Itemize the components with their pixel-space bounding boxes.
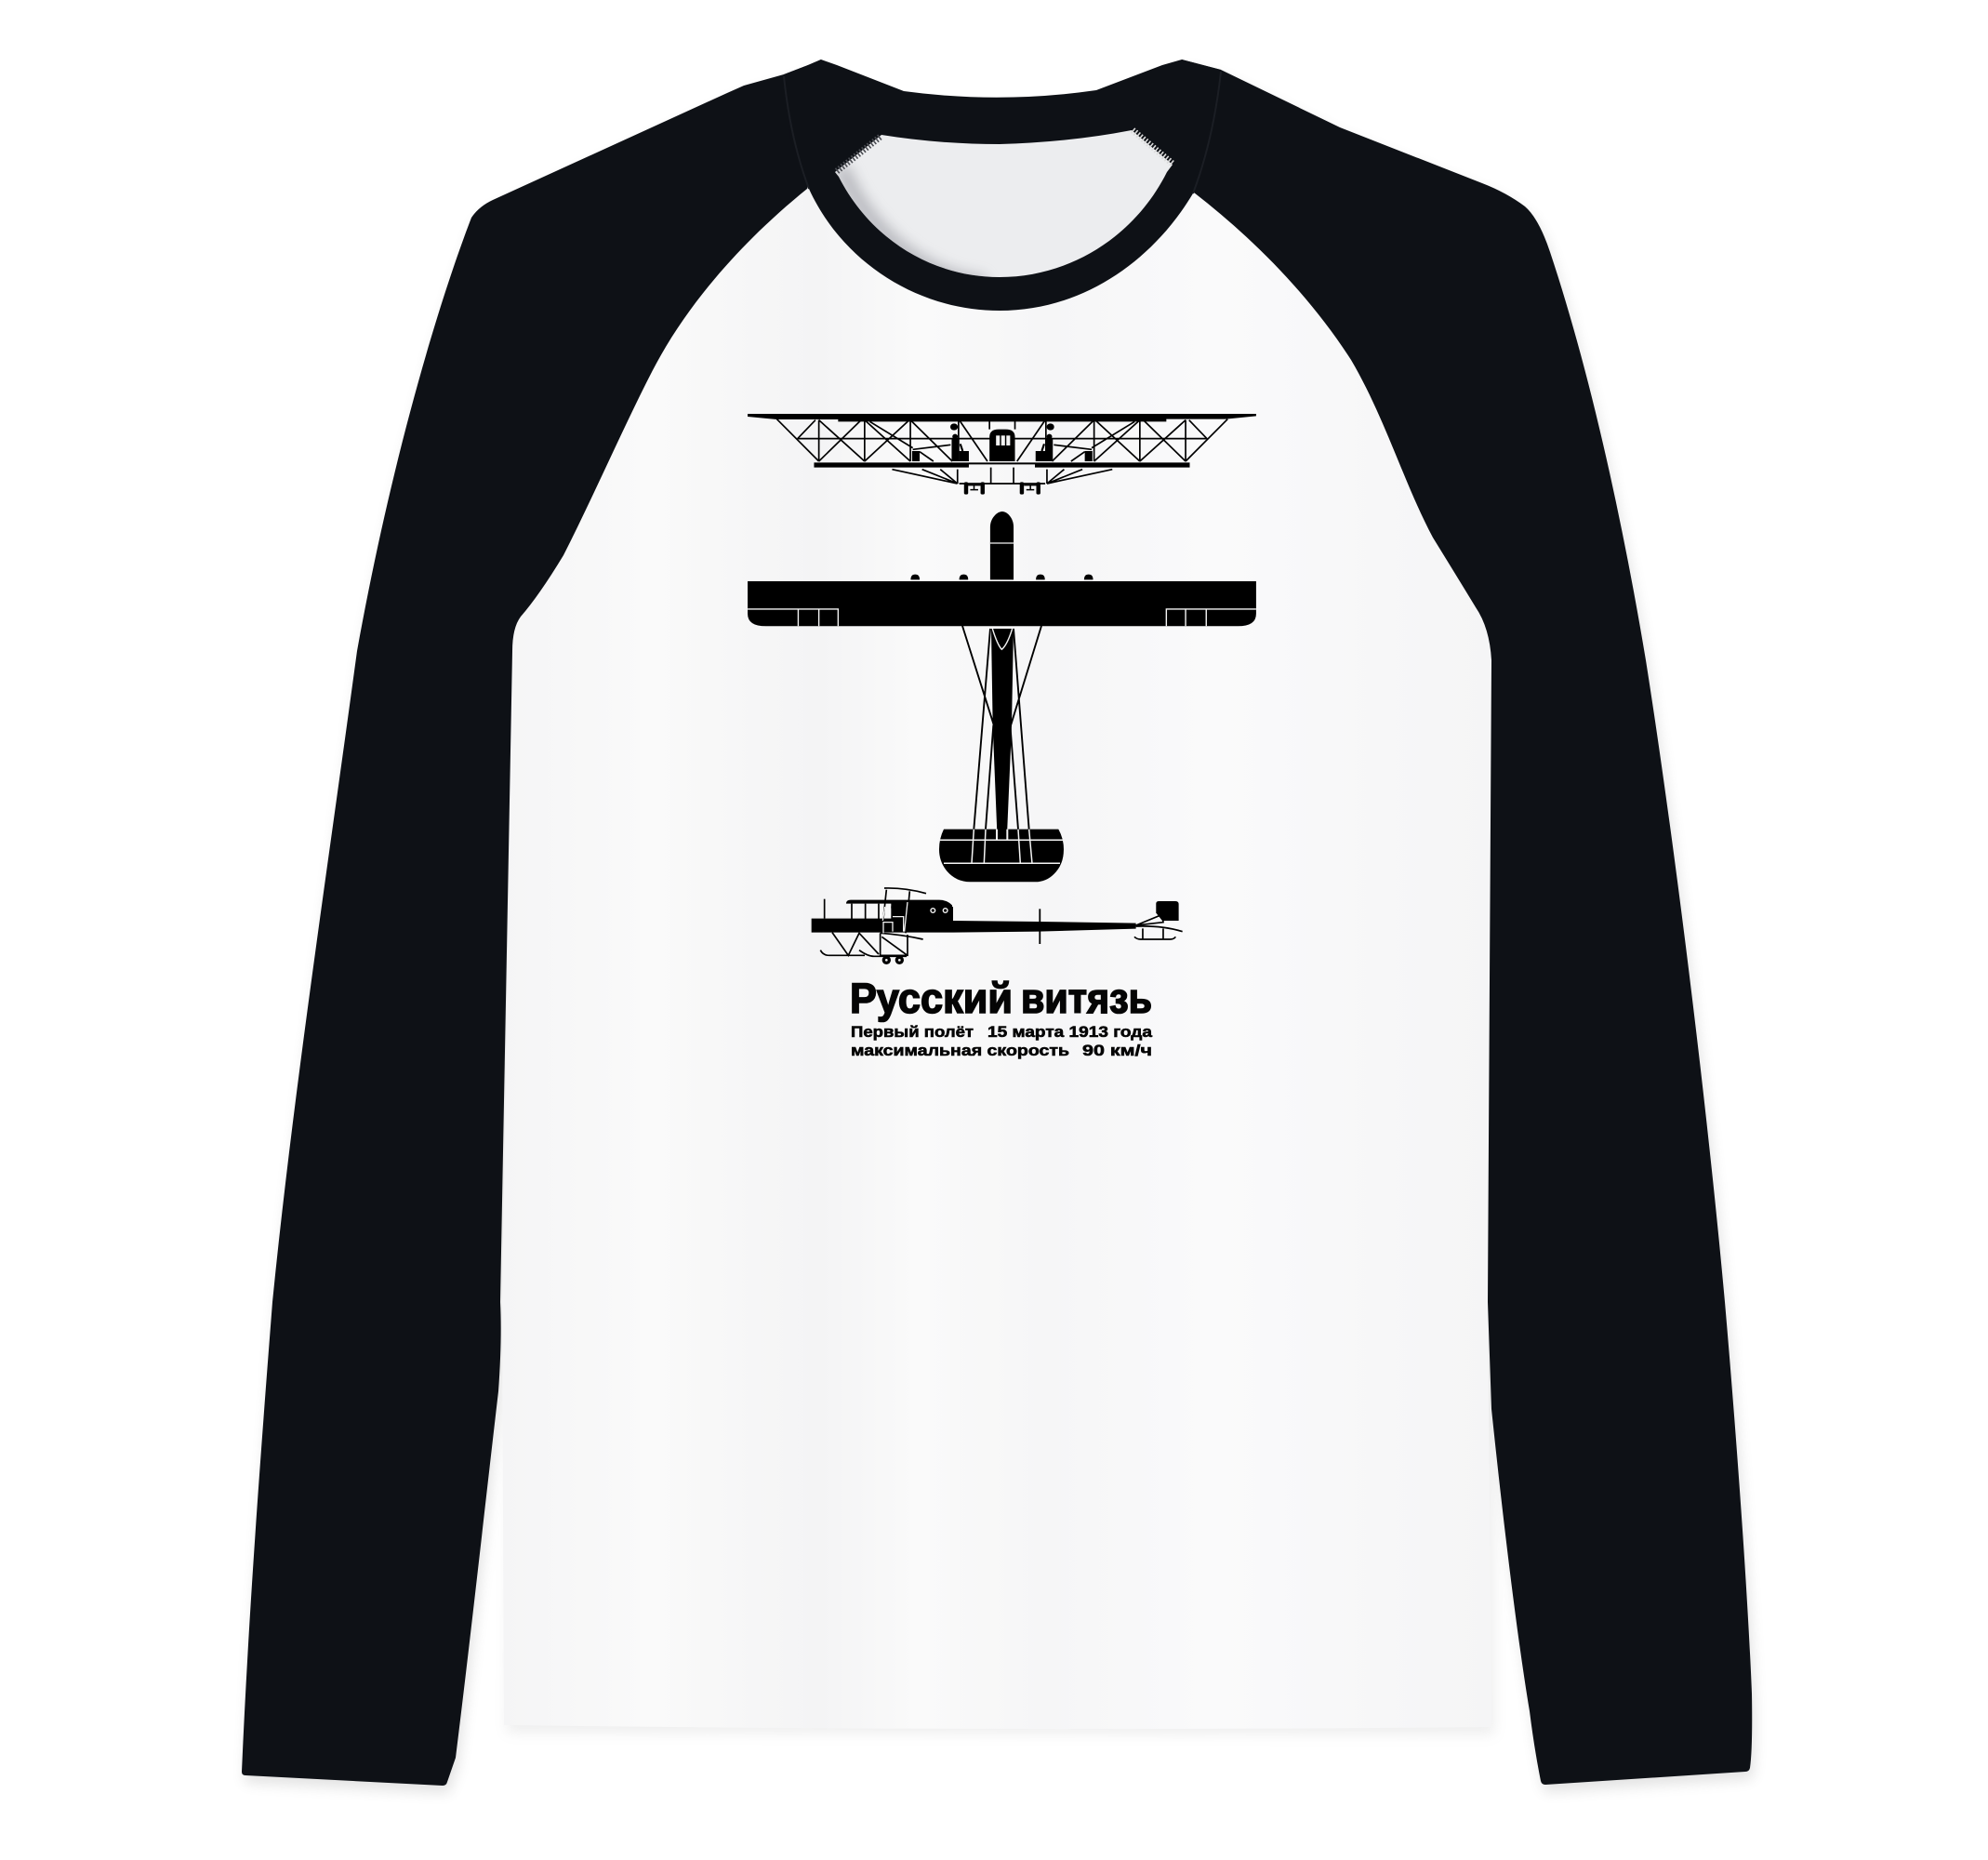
front view of aircraft	[748, 414, 1256, 495]
upper wing	[748, 414, 1256, 421]
top speed line: 90 км/ч	[1082, 1043, 1152, 1059]
tail fin	[1156, 901, 1179, 921]
truss and engines	[777, 419, 1227, 495]
title: витязь	[1021, 975, 1152, 1022]
left sleeve	[242, 60, 821, 1786]
shirt body	[502, 140, 1491, 1729]
first flight line: Первый полёт	[851, 1024, 974, 1041]
tail rigging and skid	[1134, 914, 1183, 939]
lower wing	[814, 462, 1190, 468]
shirt drop shadow	[245, 67, 1755, 1793]
collar	[784, 60, 1221, 311]
tail plane	[939, 830, 1064, 882]
fuselage body	[812, 906, 1136, 933]
nose	[990, 512, 1014, 579]
cockpit cabin	[989, 430, 1015, 461]
wires	[962, 626, 1041, 830]
title	[850, 975, 1152, 1022]
right sleeve	[1182, 60, 1752, 1785]
fuselage	[991, 629, 1014, 840]
title: Русский	[850, 975, 1013, 1022]
side view of aircraft	[812, 888, 1183, 964]
top speed line	[851, 1043, 1152, 1059]
fuselage, bracing wires and tail	[939, 626, 1064, 882]
wheels	[882, 956, 904, 964]
portholes	[931, 909, 948, 912]
wing	[748, 581, 1256, 626]
top view of aircraft: nose and wing	[748, 512, 1256, 626]
first flight line	[851, 1024, 1153, 1041]
first flight line: 15 марта 1913 года	[987, 1024, 1153, 1041]
wings, struts, landing gear	[820, 888, 1040, 956]
cabin roof and window frames	[846, 900, 952, 919]
top speed line: максимальная скорость	[851, 1043, 1069, 1059]
engine bumps	[910, 575, 1093, 579]
